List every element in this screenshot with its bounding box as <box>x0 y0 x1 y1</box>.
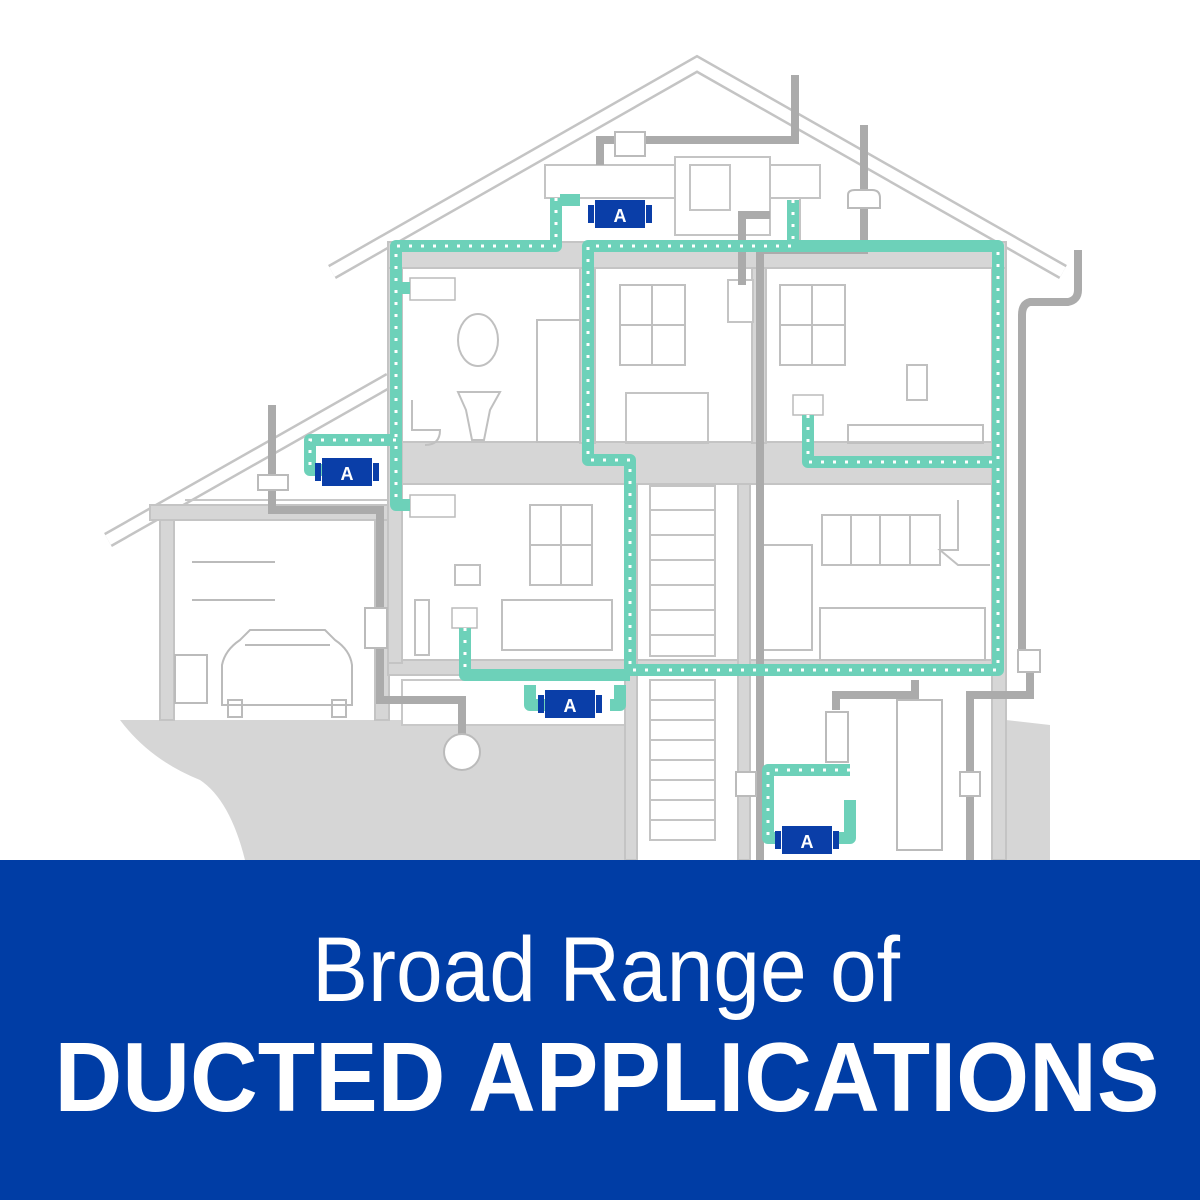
filter: attic <box>588 200 652 228</box>
house floors and walls <box>388 183 1006 860</box>
filter: garage: A <box>340 464 354 484</box>
rooms furniture <box>412 285 990 660</box>
attic HVAC unit <box>545 157 820 322</box>
filter units <box>315 200 839 854</box>
stairs <box>626 393 715 840</box>
main roof <box>332 64 1063 272</box>
garage roof <box>108 380 390 540</box>
vents <box>258 132 1040 850</box>
grilles <box>410 278 823 628</box>
filter: garage <box>315 458 379 486</box>
gray pipes <box>272 75 1078 860</box>
heading line 1: Broad Range of <box>312 919 900 1021</box>
garage structure <box>150 505 390 720</box>
filter: crawlspace <box>538 690 602 718</box>
ground <box>120 680 1050 860</box>
teal ducts <box>310 198 998 838</box>
car <box>222 630 352 717</box>
filter: basement: A <box>800 832 814 852</box>
filter: basement <box>775 826 839 854</box>
bottom banner <box>0 860 1200 1200</box>
filter: attic: A <box>614 206 626 226</box>
filter: crawlspace: A <box>564 696 576 716</box>
heading line 2: DUCTED APPLICATIONS <box>54 1022 1160 1132</box>
